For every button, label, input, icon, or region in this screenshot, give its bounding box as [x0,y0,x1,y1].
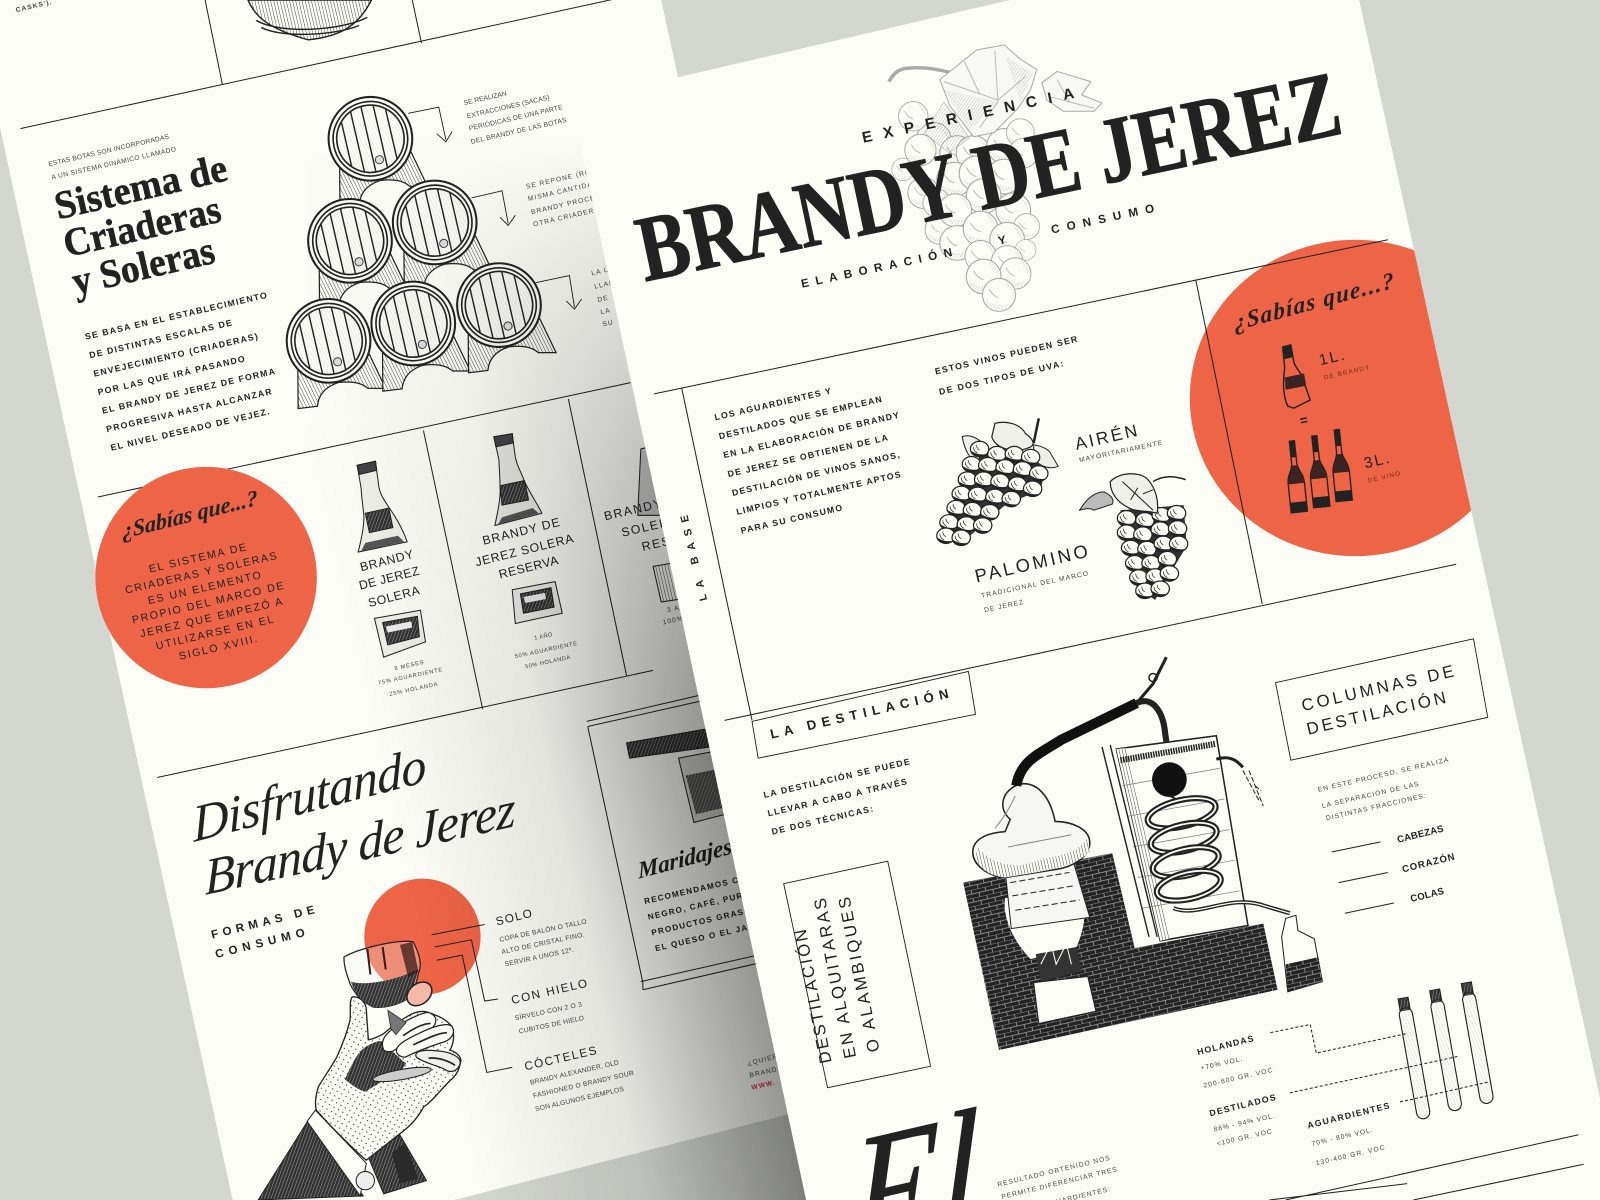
text: reserva label: RESERVA [497,553,561,581]
text: barrel notes: SE REPONE (ROCÍO) LA [525,160,623,191]
text: sistema description: SE BASA EN EL ESTABLECIMIENTO [84,290,269,342]
subtitle: elaboracion y consumo: ELABORACIÓN [800,246,953,291]
illustration: hand holding glass [258,941,461,1200]
box: alquitaras: EN ALQUITARAS [810,894,860,1060]
panel: maridajes [586,695,756,990]
text: solo [495,907,588,968]
text: base description: DESTILACIÓN DE VINOS SANOS, [731,448,902,498]
illustration: alembic still [963,657,1322,1050]
text: cocteles: BRANDY ALEXANDER, OLD [529,1059,621,1087]
text: barrel notes [463,90,634,328]
text: reserva label: 50% HOLANDA [525,655,572,670]
text: columnas description: LA SEPARACIÓN DE LAS [1321,779,1420,810]
text: holandas: 200-600 GR. VOC [1203,1067,1274,1090]
text: 3 litros: DE VINO [1367,470,1402,485]
text: reserva label: BRANDY DE [481,515,563,548]
box: la destilacion: LA DESTILACIÓN [769,685,954,742]
text: footer contact: BRANDY [749,1065,784,1079]
illustration: barrel pyramid [275,88,556,411]
text: barrel notes: DE [597,295,609,304]
callout: sabias que left: SIGLO XVIII. [178,633,260,663]
text: aguardientes: AGUARDIENTES [1306,1100,1392,1131]
text: intro to system: ESTAS BOTAS SON INCORPORADAS [48,133,171,168]
callout: sabias que left: JEREZ QUE EMPEZÓ A [139,595,285,640]
text: barrel notes: MISMA CANTIDAD DE [527,177,613,203]
text: destilacion intro: LLEVAR A CABO A TRAVÉS [767,776,909,818]
text: maridajes description: NEGRO, CAFÉ, PUROS, [647,886,762,922]
text: con hielo [510,977,588,1036]
text: solera label: DE JEREZ [357,563,422,593]
box: alquitaras [784,861,931,1088]
text: solera label: 25% HOLANDA [389,682,439,698]
illustration and text: bottle gran reserva [603,446,745,626]
heading: sistema de criaderas y soleras: Sistema de [50,146,231,228]
callout: sabias que left: EL SISTEMA DE [148,541,249,576]
text: palomino [973,540,1090,614]
subtitle: elaboracion y consumo: CONSUMO [1050,202,1155,237]
text: cocteles [523,1044,636,1113]
title: experiencia: EXPERIENCIA [861,85,1076,147]
text: solera label: BRANDY [358,547,416,574]
text: cocteles: FASHIONED O BRANDY SOUR [533,1070,636,1100]
text: barrel notes: LA [600,307,611,316]
text: 1 litro: 1L. [1317,346,1348,369]
illustration: bottle solera [357,461,426,657]
text: 3 litros [1364,455,1400,482]
text: base description: EN LA ELABORACIÓN DE BRANDY [722,409,901,460]
text: barrel notes: BRANDY PROCEDENTE [531,188,623,216]
callout: orange circle with conversion [1190,240,1472,556]
list: fracciones: CORAZÓN [1401,850,1457,875]
text: palomino: TRADICIONAL DEL MARCO [981,570,1090,600]
callout: sabias que left [95,467,317,688]
subtitle: elaboracion y consumo: Y [997,233,1007,248]
text: 3 litros: 3L. [1362,450,1393,472]
illustration and text: bottle gran reserva: RESERVA [640,525,710,554]
text: solera label: 75% AGUARDIENTE [378,667,444,687]
text: resultado: PERMITE DIFERENCIAR TRES [1001,1166,1119,1200]
text: cocteles: SON ALGUNOS EJEMPLOS [535,1086,626,1113]
text: palomino: DE JEREZ [984,599,1025,614]
text: airen [1073,420,1164,464]
heading: sabias que: ¿Sabías que...? [1233,268,1395,337]
text: reserva label: 50% AGUARDIENTE [514,641,579,660]
text: destilados: <100 GR. VOC [1216,1128,1273,1148]
text: cocteles: CÓCTELES [523,1044,598,1073]
heading: maridajes: Maridajes [636,833,733,885]
text: footer contact: WWW. [751,1079,776,1092]
text: formas de consumo: CONSUMO [214,926,306,961]
text: con hielo: SÍRVELO CON 2 O 3 [514,999,584,1022]
heading: sistema de criaderas y soleras: Criaderas [59,187,225,266]
text: barrel notes: LA ÚLTIMA [590,259,634,277]
illustration and text: bottle gran reserva: BRANDY DE JEREZ [603,479,739,523]
callout: sabias que left: CRIADERAS Y SOLERAS [124,550,279,597]
list: fracciones: COLAS [1409,886,1447,905]
text: la base vertical: LA BASE [679,514,710,602]
icon: three wine bottles [1284,429,1352,513]
text: solera label [357,547,444,698]
text: solera label: 8 MESES [394,660,425,672]
text: barrel notes: LLAMADA [594,275,633,291]
heading: sistema de criaderas y soleras: y Soleras [68,228,219,304]
text: holandas: +70% VOL. [1200,1056,1244,1072]
text: tipos de uva: ESTOS VINOS PUEDEN SER [934,334,1079,376]
text: 1 litro [1320,352,1368,380]
text: maridajes description: RECOMENDAMOS CHOCOLATE [643,863,794,906]
text: columnas description [1317,757,1450,822]
title: brandy de jerez: BRANDY DE JEREZ [628,52,1350,302]
text: solera label: SOLERA [367,583,422,610]
text: airen: MAYORITARIAMENTE [1079,440,1164,464]
text: destilados: 86% - 94% VOL. [1213,1113,1276,1134]
text: con hielo: CON HIELO [510,977,588,1007]
panel: left sheet [0,0,816,1200]
circle: orange accent [364,879,481,995]
text: barrel notes: EXTRACCIONES (SACAS) [466,94,551,120]
text: sistema description: PROGRESIVA HASTA ALCANZAR [105,386,274,434]
text: tipos de uva [934,334,1079,397]
box: columnas de destilacion: COLUMNAS DE [1300,661,1458,715]
text: base description: DE JEREZ SE OBTIENEN DE LA [727,432,890,479]
text: equals: = [1298,412,1309,428]
illustration and text: bottle gran reserva: 3 AÑOS [666,599,698,614]
text: formas de consumo [210,903,316,961]
text: sistema description: DE DISTINTAS ESCALAS DE [88,317,234,360]
illustration: airen grapes [937,418,1058,546]
text: destilacion intro: DE DOS TÉCNICAS: [771,803,875,837]
heading: disfrutando brandy de jerez: Disfrutando [190,736,428,854]
text: footer contact: ¿QUIERES [747,1051,790,1067]
text: base description: DESTILADOS QUE SE EMPLEAN [718,394,884,441]
text: barrel notes: PERIÓDICAS DE UNA PARTE [468,102,564,133]
text: solo: SOLO [495,907,533,928]
text: con hielo: CUBITOS DE HIELO [518,1015,586,1036]
text: 1 litro: DE BRANDY [1323,364,1371,382]
text: base description: LOS AGUARDIENTES Y [714,386,833,422]
text: palomino: PALOMINO [973,540,1090,587]
text: aguardientes: 70% - 80% VOL. [1311,1127,1374,1148]
text: aguardientes [1306,1100,1392,1167]
illustration: pale grape cluster [889,45,1102,311]
text: barrel notes: DEL BRANDY DE LAS BOTAS [470,117,568,146]
icon: brandy bottle [1283,345,1310,408]
text: sistema description: POR LAS QUE IRÁ PASANDO [97,353,247,397]
box: alquitaras: O ALAMBIQUES [834,893,884,1054]
text: reserva label [474,515,579,670]
text: destilados [1208,1092,1278,1148]
callout: sabias que left: UTILIZARSE EN EL [155,613,276,652]
text: base description: PARA SU CONSUMO [740,502,844,536]
text: destilados: DESTILADOS [1208,1092,1278,1118]
text: sistema description: ENVEJECIMIENTO (CRIADERAS) [92,331,260,379]
text: sistema description: EL NIVEL DESEADO DE VEJEZ. [110,406,272,453]
text: airen: AIRÉN [1073,420,1139,454]
text: columnas description: EN ESTE PROCESO, SE REALIZA [1317,757,1450,794]
subtitle: elaboracion y consumo [800,202,1155,291]
callout: sabias que left: ES UN ELEMENTO [147,569,264,607]
box: columnas de destilacion: DESTILACIÓN [1305,687,1450,739]
callout: sabias que left: ¿Sabías que...? [121,485,258,544]
text: reserva label: JEREZ SOLERA [474,531,576,569]
text: tipos de uva: DE DOS TIPOS DE UVA: [938,358,1066,397]
illustration and text: bottle gran reserva: SOLERA GRAN [620,502,725,540]
heading: disfrutando brandy de jerez: Brandy de Jerez [204,781,516,907]
text: solo: SERVIR A UNOS 12º. [504,947,575,968]
text: reserva label: 1 AÑO [534,631,554,642]
text: destilacion intro: LA DESTILACIÓN SE PUEDE [762,755,912,800]
box: columnas de destilacion [1276,639,1488,760]
text: destilacion intro [762,755,912,837]
arrows: barrel flow [408,107,582,309]
text: formas de consumo: FORMAS DE [210,903,316,942]
text: footer contact [747,1051,790,1092]
illustration: test tubes [1396,982,1494,1120]
shadow: cast by right sheet [406,179,806,1200]
illustration and text: bottle gran reserva: 100% AGUARDIENTE [662,602,745,626]
text: holandas [1196,1033,1274,1090]
heading: sistema de criaderas y soleras [50,146,249,304]
illustration: palomino grapes [1080,474,1188,600]
text: maridajes description: PRODUCTOS GRASOS COMO [651,897,792,937]
illustration: bottle reserva [494,434,562,623]
panel: right sheet [571,0,1600,1200]
box: alquitaras: DESTILACIÓN [790,925,836,1065]
text: base description: LIMPIOS Y TOTALMENTE APTOS [735,469,903,517]
text: sistema description: EL BRANDY DE JEREZ DE FORMA [101,366,277,416]
text: maridajes description: EL QUESO O EL JAMÓN. [654,915,775,953]
box: la destilacion [752,671,976,758]
list: fracciones: CABEZAS [1396,823,1446,846]
text: holandas: HOLANDAS [1196,1033,1256,1057]
list: fracciones [1332,823,1457,913]
text: aguardientes: 130-400 GR. VOC [1315,1144,1386,1167]
callout: sabias que left: PROPIO DEL MARCO DE [131,580,286,627]
text: barrel notes: OTRA CRIADERA [533,206,601,228]
text: solo: ALTO DE CRISTAL FINO. [501,931,586,956]
illustration: cigar and glass [626,728,724,824]
text: resultado: RESULTADO OBTENIDO NOS [997,1155,1112,1189]
text: barrel notes: SU [602,319,615,328]
text: columnas description: DISTINTAS FRACCIONES: [1325,792,1427,822]
text: solo: COPA DE BALÓN O TALLO [499,916,588,944]
illustration: cut-off barrel [248,0,371,40]
text: barrel notes: SE REALIZAN [463,90,508,107]
dashed connectors [1270,1024,1490,1102]
text: intro to system: A UN SISTEMA DINÁMICO LLAMADO [50,144,178,182]
